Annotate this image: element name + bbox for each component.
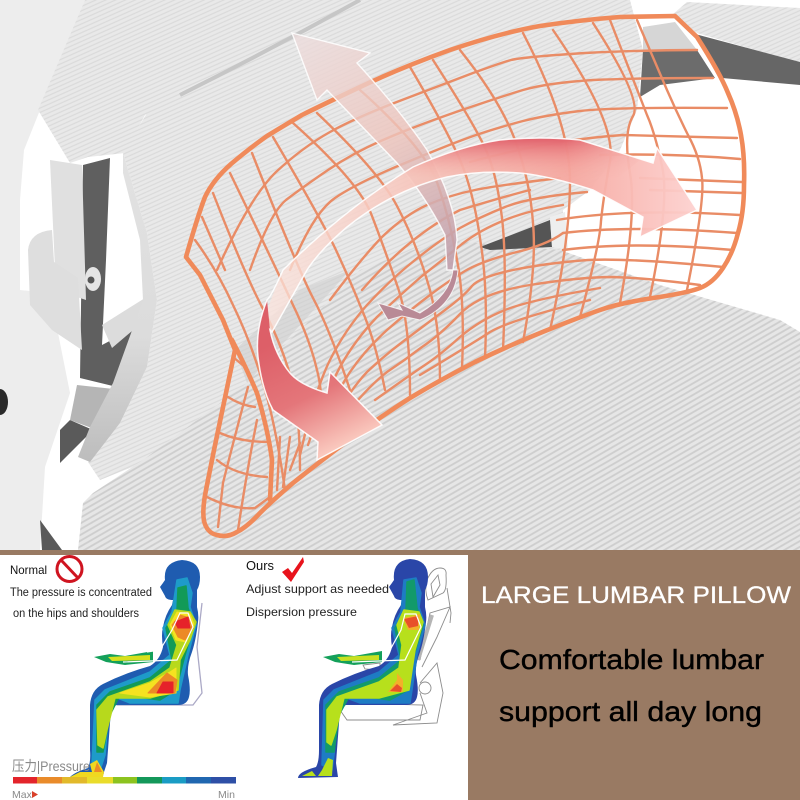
text: comfortable lumbar: Comfortable lumbar <box>499 644 764 675</box>
back shadow <box>235 270 350 383</box>
screw <box>85 267 101 291</box>
arm dark <box>695 34 800 85</box>
text: pressure description: on the hips and shoulders <box>13 608 139 620</box>
headrest crease <box>180 0 360 95</box>
orange mesh grid <box>195 20 742 530</box>
text: pressure label: 压力|Pressure <box>12 758 90 774</box>
armrest top <box>672 2 800 63</box>
black knob <box>0 389 8 415</box>
arrow lower head <box>257 300 382 460</box>
white outline lines <box>123 613 193 662</box>
arrow body and right head <box>262 138 697 332</box>
arrow: small centre <box>378 270 458 320</box>
icon: red check <box>282 557 304 582</box>
light strut <box>50 160 86 300</box>
thermal figure: normal <box>70 560 200 777</box>
lumbar dark band <box>480 220 552 250</box>
backrest <box>88 0 643 480</box>
grey block <box>70 385 123 430</box>
panel: tagline <box>468 555 800 800</box>
backrest frame <box>78 153 157 462</box>
clip bracket <box>28 230 82 350</box>
dark strut <box>80 158 140 387</box>
legend colour bar <box>13 777 236 784</box>
mesh cross lines <box>195 20 702 490</box>
chair back line <box>117 603 202 705</box>
lower dark strut <box>40 420 93 550</box>
heading: normal: Normal <box>10 563 47 577</box>
seat <box>78 240 800 550</box>
brown top strip <box>0 550 800 555</box>
left upright column <box>0 0 85 550</box>
panel: normal <box>10 556 236 800</box>
arrow outline <box>257 138 697 460</box>
text: support all day long: support all day long <box>499 696 762 727</box>
seat bracket <box>102 298 145 348</box>
white outline lines <box>352 614 421 662</box>
heading: LARGE LUMBAR PILLOW <box>481 582 791 609</box>
arrow: double headed curved <box>257 138 697 460</box>
heading: ours: Ours <box>246 558 274 573</box>
mesh lengthwise lines <box>217 50 742 455</box>
panel: ours <box>246 557 451 778</box>
mesh outline <box>186 16 744 536</box>
text: pressure description <box>10 587 152 620</box>
text: adjust support <box>246 582 389 619</box>
text: pressure description: The pressure is concentrated <box>10 587 152 599</box>
arrow red shading <box>411 138 626 170</box>
arm connector <box>643 22 697 50</box>
icon: prohibited <box>57 556 82 582</box>
chair outline <box>340 568 451 725</box>
headrest <box>38 0 365 163</box>
chair photo <box>0 0 800 550</box>
arrow: up left <box>292 33 457 270</box>
thermal figure: ours <box>298 559 428 778</box>
text: adjust support: Dispersion pressure <box>246 605 357 619</box>
text: adjust support: Adjust support as needed <box>246 582 389 596</box>
mesh lower lobe lines <box>207 357 300 530</box>
